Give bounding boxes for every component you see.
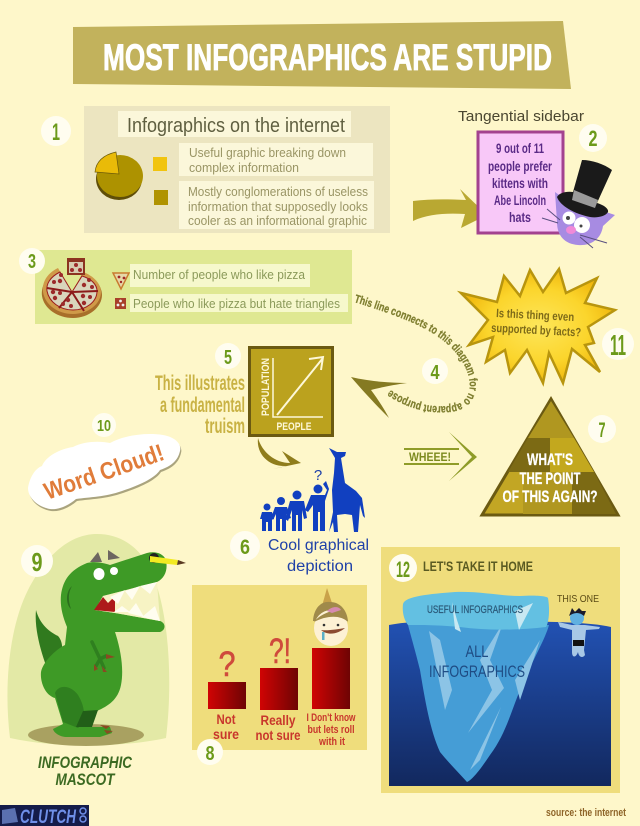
badge 4 — [422, 358, 448, 384]
pie chart — [95, 152, 143, 200]
arrow: wheee — [404, 432, 477, 481]
bar labels: sure — [213, 727, 239, 742]
badge 6 — [230, 531, 260, 561]
sea — [389, 620, 611, 786]
starburst 11 — [461, 269, 615, 383]
dinosaur body — [41, 552, 167, 737]
badge 7 — [588, 415, 616, 443]
curved arrow 4 — [351, 377, 407, 418]
badge 5 — [215, 343, 241, 369]
panel 1 heading: Infographics on the internet — [127, 115, 345, 137]
dinosaur eyes — [94, 567, 118, 580]
iceberg highlights — [452, 602, 533, 632]
bar labels: I Don't know — [306, 712, 356, 724]
dinosaur arm — [92, 642, 115, 672]
iceberg below water — [408, 625, 549, 782]
fundamental truism text: a fundamental — [160, 394, 245, 417]
badge 12: 12 — [396, 557, 410, 582]
badge 10 — [92, 413, 116, 437]
sidebar box: 9 out of 11 — [496, 140, 544, 156]
badge 9 — [21, 545, 53, 577]
sidebar box: people prefer — [488, 158, 552, 174]
mascot background blob — [7, 534, 169, 746]
sidebar heading: Tangential sidebar — [458, 108, 584, 125]
curved connecting text: This line connects to this diagram for no apparent purpose — [356, 294, 478, 413]
dinosaur leg — [76, 710, 98, 727]
pyramid 7: THE POINT — [520, 469, 581, 488]
person 4 — [305, 481, 329, 531]
badge 5: 5 — [224, 347, 232, 369]
dinosaur foot claws — [100, 725, 113, 734]
badge 12 — [389, 554, 417, 582]
badge 2 — [579, 124, 607, 152]
description: useful graphic: Useful graphic breaking down — [189, 146, 346, 160]
starburst 11: supported by facts? — [491, 321, 581, 339]
panel 12 heading: LET'S TAKE IT HOME — [423, 558, 533, 574]
icon: pizza — [42, 258, 102, 318]
cool graphical depiction caption — [268, 537, 369, 575]
sidebar box: hats — [509, 209, 531, 225]
all infographics label: ALL — [466, 642, 488, 661]
panel 1: infographics on the internet — [84, 106, 390, 233]
badge 11 — [602, 328, 634, 362]
mascot caption: INFOGRAPHIC — [38, 753, 133, 772]
useful infographics label: USEFUL INFOGRAPHICS — [427, 604, 523, 616]
legend: pizza slice — [113, 264, 310, 289]
dinosaur cheek — [67, 586, 72, 609]
cool graphical depiction caption: Cool graphical — [268, 537, 369, 554]
badge 8: 8 — [206, 743, 214, 765]
panel 3: pizza chart — [35, 250, 352, 324]
fundamental truism text: This illustrates — [155, 372, 245, 395]
cool graphical depiction caption: depiction — [287, 558, 353, 575]
description: useless information: cooler as an informational graphic — [188, 214, 367, 228]
mascot horns — [90, 550, 120, 562]
mascot caption — [38, 753, 133, 789]
panel 8: bar chart — [192, 585, 367, 750]
dinosaur thigh — [55, 687, 84, 728]
face with unicorn horn — [313, 588, 348, 646]
question mark: ? — [314, 467, 322, 484]
fundamental truism text — [155, 372, 245, 438]
badge 11: 11 — [610, 330, 626, 362]
bar annotations: ? — [218, 645, 236, 684]
population chart: PEOPLE — [276, 421, 312, 433]
icon: cat in top hat — [542, 160, 615, 248]
panel 12: iceberg — [381, 547, 620, 793]
person 3 — [285, 490, 307, 531]
mascot — [7, 534, 186, 746]
description: useful graphic: complex information — [189, 161, 299, 175]
population chart — [250, 348, 332, 436]
sidebar box: kittens with — [492, 175, 548, 191]
arrow to sidebar — [413, 189, 487, 228]
dinosaur tail — [36, 610, 62, 668]
badge 3 — [19, 248, 45, 274]
legend: pizza slice: Number of people who like pizza — [133, 268, 305, 282]
description: useless information: Mostly conglomerations of useless — [188, 185, 368, 199]
bar labels: but lets roll — [308, 724, 354, 736]
bar labels: not sure — [256, 728, 301, 743]
pyramid 7: OF THIS AGAIN? — [502, 487, 598, 506]
this one label: THIS ONE — [557, 593, 599, 605]
badge 1 — [41, 116, 71, 146]
fundamental truism text: truism — [205, 415, 245, 438]
legend: pizza pan: People who like pizza but hate triangles — [133, 297, 340, 311]
mascot caption: MASCOT — [56, 770, 116, 789]
dinosaur mouth — [95, 582, 160, 621]
bar labels: Not — [216, 712, 236, 727]
badge 7: 7 — [598, 419, 606, 442]
iceberg cracks — [429, 623, 540, 770]
bar annotations: ?! — [269, 632, 291, 671]
starburst 11: Is this thing even — [496, 306, 574, 324]
bar labels — [213, 712, 356, 748]
badge 3: 3 — [28, 251, 36, 273]
sidebar box: Abe Lincoln — [494, 192, 546, 208]
badge 10: 10 — [97, 418, 111, 435]
pyramid 7 — [482, 399, 618, 515]
badge 1: 1 — [52, 119, 60, 146]
description: useless information: information that supposedly looks — [188, 200, 368, 214]
top hat — [557, 160, 612, 217]
logo — [0, 805, 89, 826]
swimmer — [558, 608, 600, 657]
bar labels: Really — [260, 713, 296, 728]
description: useful graphic — [179, 143, 373, 176]
curved arrow to figures — [258, 438, 301, 469]
arrow: wheee: WHEEE! — [409, 450, 451, 464]
bar labels: with it — [318, 736, 345, 748]
badge 2: 2 — [588, 126, 598, 151]
sidebar box — [478, 132, 563, 233]
all infographics label — [429, 642, 525, 681]
badge 8 — [197, 739, 223, 765]
badge 6: 6 — [240, 536, 250, 559]
giraffe — [329, 448, 365, 532]
mascot ground shadow — [28, 724, 144, 746]
all infographics label: INFOGRAPHICS — [429, 662, 525, 681]
person 2 — [271, 497, 291, 531]
legend swatches — [153, 157, 168, 205]
person 1 — [260, 504, 274, 531]
description: useless information — [179, 181, 374, 229]
population chart: POPULATION — [260, 358, 272, 416]
word cloud: Word Cloud! — [41, 439, 168, 506]
title banner — [73, 21, 571, 89]
bars — [208, 648, 350, 710]
iceberg above water — [403, 592, 549, 630]
badge 9: 9 — [32, 547, 42, 577]
people and giraffe — [260, 448, 365, 532]
bar annotations — [218, 632, 291, 684]
badge 4: 4 — [430, 362, 440, 384]
pyramid 7: WHAT'S — [527, 450, 573, 469]
pencil in eye — [149, 553, 186, 565]
